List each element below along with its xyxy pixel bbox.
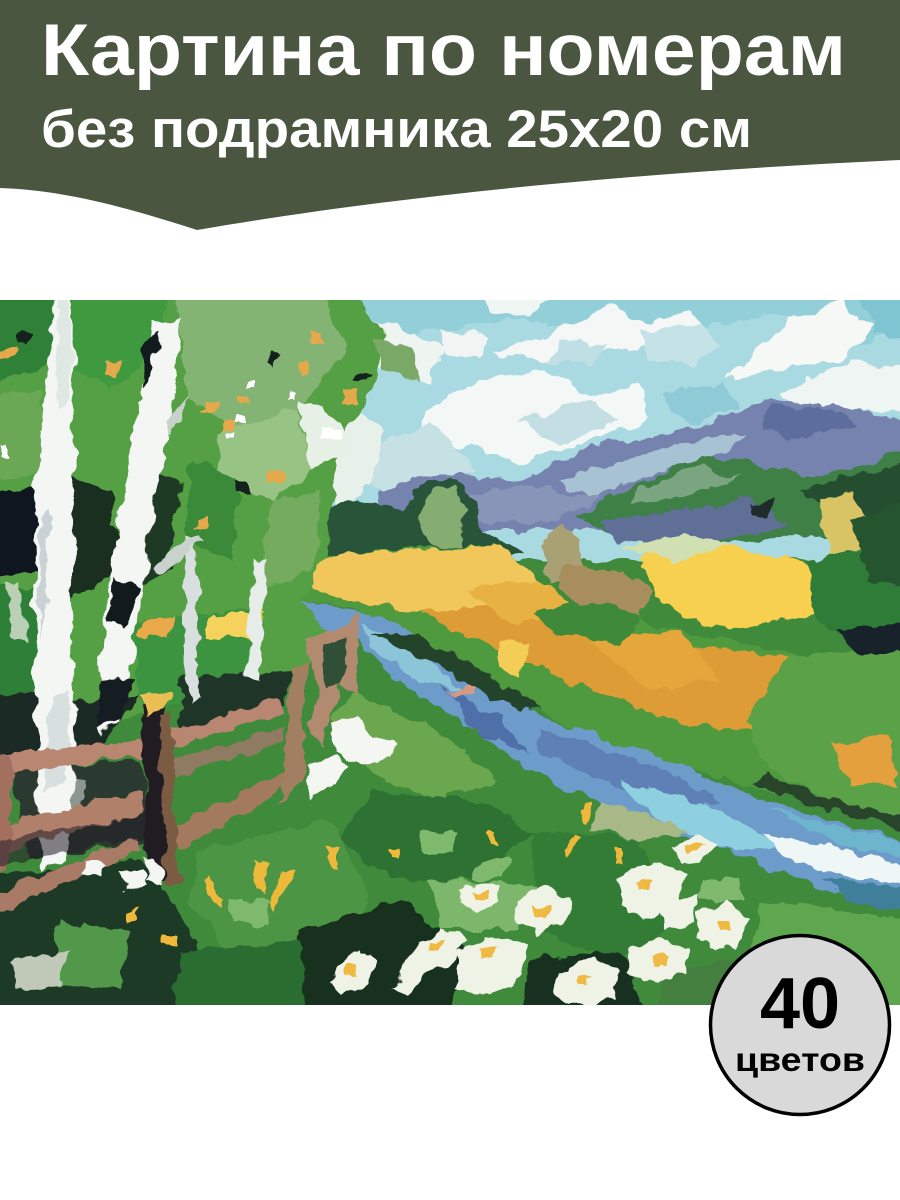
daisies [333,833,747,1006]
title: Картина по номерам [41,10,846,91]
foreground meadow [0,640,900,1050]
river [190,595,900,915]
sky [300,260,900,560]
subtitle: без подрамника 25х20 см [41,100,752,159]
base ground [0,260,900,1050]
birch trunks [5,290,267,870]
lower left undergrowth [0,670,290,860]
banner: header ribbon [0,0,900,230]
painting: landscape by numbers [0,260,900,1050]
mountains [380,400,900,550]
birch trees: foliage [0,260,420,770]
badge number: 40 [760,964,840,1044]
far treeline [320,475,585,585]
golden fields and meadow [295,490,900,830]
badge: 40 colours [710,936,890,1114]
white flowers by fence [82,720,400,890]
wooden fence [0,615,358,920]
yellow wildflowers [125,805,623,943]
badge label: цветов [735,1041,865,1078]
